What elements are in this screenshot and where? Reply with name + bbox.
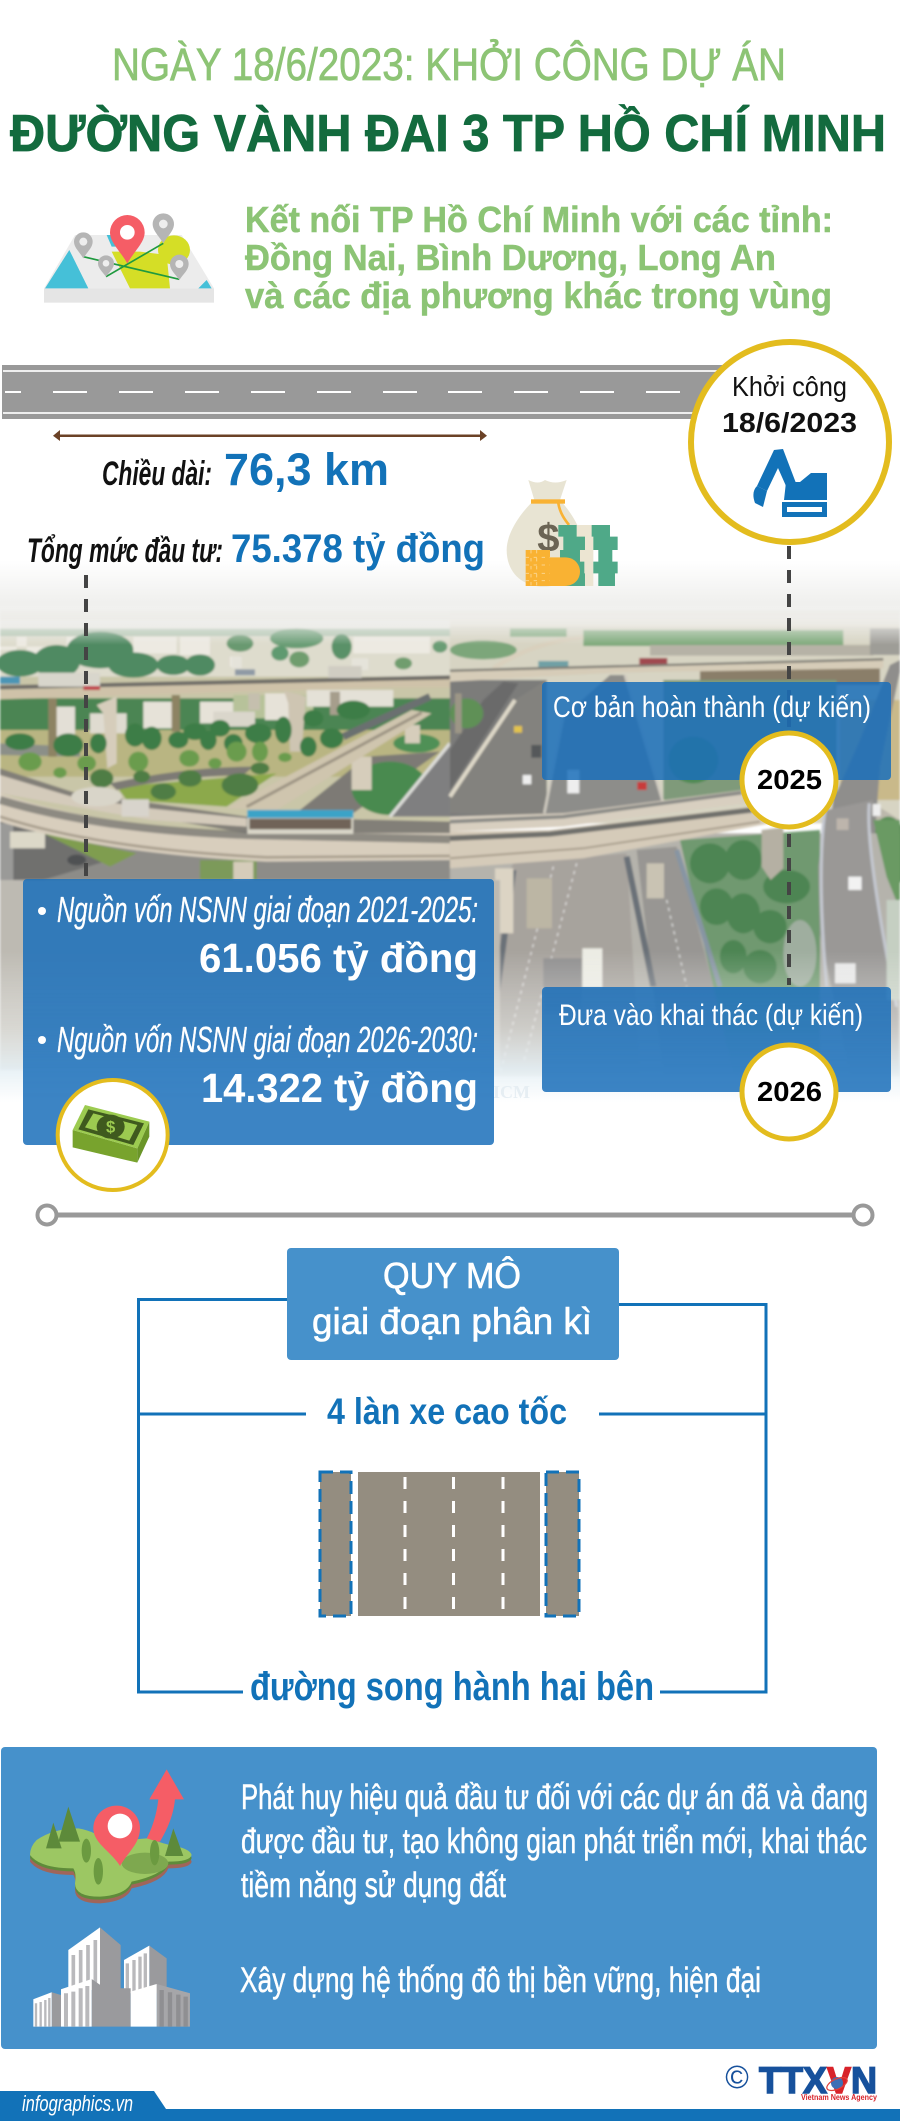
footer bar: infographics.vn [22, 2091, 133, 2116]
scale frame lines [138, 1300, 766, 1692]
icon: land with location pin and rising arrow [30, 1769, 192, 1903]
icon: excavator [753, 449, 827, 517]
faint photo credit: ICM [493, 1082, 530, 1102]
road cross-section diagram [320, 1472, 579, 1616]
panel: start date circle [691, 342, 889, 542]
logo: TTXVN: Vietnam News Agency [801, 2093, 877, 2102]
heading: scale: giai đoạn phân kì [312, 1301, 592, 1342]
panel: start date circle: Khởi công [732, 371, 847, 402]
benefit text 1: tiềm năng sử dụng đất [241, 1866, 506, 1905]
photo: curved elevated road [450, 790, 767, 868]
panel: funding sources: 61.056 tỷ đồng [199, 935, 478, 981]
panel: funding sources [23, 879, 494, 1145]
section divider [38, 1206, 872, 1224]
length arrow [53, 430, 487, 441]
heading: scale [287, 1248, 619, 1360]
dashed line: right [787, 546, 791, 985]
label: four expressway lanes: 4 làn xe cao tốc [327, 1391, 567, 1432]
total investment label: 75.378 tỷ đồng [231, 527, 485, 571]
panel: funding sources: Nguồn vốn NSNN giai đoạn 2026-2030: [57, 1019, 478, 1060]
heading: scale: QUY MÔ [383, 1255, 521, 1296]
photo: right upper background [450, 610, 900, 890]
icon: money bag with cash and coins [507, 480, 618, 587]
icon: cash stack in circle [58, 1080, 168, 1190]
panel: start date circle: 18/6/2023 [722, 407, 857, 438]
road illustration [2, 365, 722, 419]
subtitle text block: và các địa phương khác trong vùng [245, 275, 832, 316]
panel: funding sources: 14.322 tỷ đồng [201, 1065, 478, 1111]
length label: 76,3 km [224, 444, 389, 495]
subtitle text block: Kết nối TP Hồ Chí Minh với các tỉnh: [245, 199, 833, 240]
icon: cash stack in circle: $ [106, 1118, 116, 1137]
icon: money bag with cash and coins: $ [537, 517, 559, 561]
panel: benefits [1, 1747, 877, 2049]
panel: operation 2026: 2026 [757, 1076, 822, 1107]
photo: lower left under funding panel [0, 880, 500, 1070]
benefit text 1 [241, 1778, 868, 1905]
photo: left upper part [0, 610, 450, 880]
photo fade: top [0, 560, 900, 645]
footer bar [0, 2091, 900, 2121]
icon: map with location pins [44, 213, 214, 303]
subtitle text block [245, 199, 833, 316]
panel: completion 2025 [542, 682, 891, 827]
panel: completion 2025: 2025 [757, 764, 822, 795]
photo fade: bottom [0, 950, 900, 1102]
label: parallel roads: đường song hành hai bên [250, 1665, 654, 1709]
logo: TTXVN: TTXVN [759, 2060, 877, 2101]
subtitle text block: Đồng Nai, Bình Dương, Long An [245, 237, 776, 278]
icon: buildings [33, 1927, 190, 2027]
panel: operation 2026 [542, 987, 891, 1139]
total investment label: Tổng mức đầu tư: [27, 532, 223, 570]
total investment label [27, 527, 485, 571]
panel: funding sources: Nguồn vốn NSNN giai đoạn 2021-2025: [57, 889, 478, 930]
length label [102, 444, 389, 495]
photo: ring road interchange rendering [0, 610, 900, 1100]
logo: TTXVN: © [725, 2059, 749, 2095]
title line 1: NGÀY 18/6/2023: KHỞI CÔNG DỰ ÁN [112, 39, 786, 90]
length label: Chiều dài: [102, 455, 212, 493]
dashed line: left [84, 575, 88, 878]
photo: lower carriageways and trees [450, 800, 900, 1100]
